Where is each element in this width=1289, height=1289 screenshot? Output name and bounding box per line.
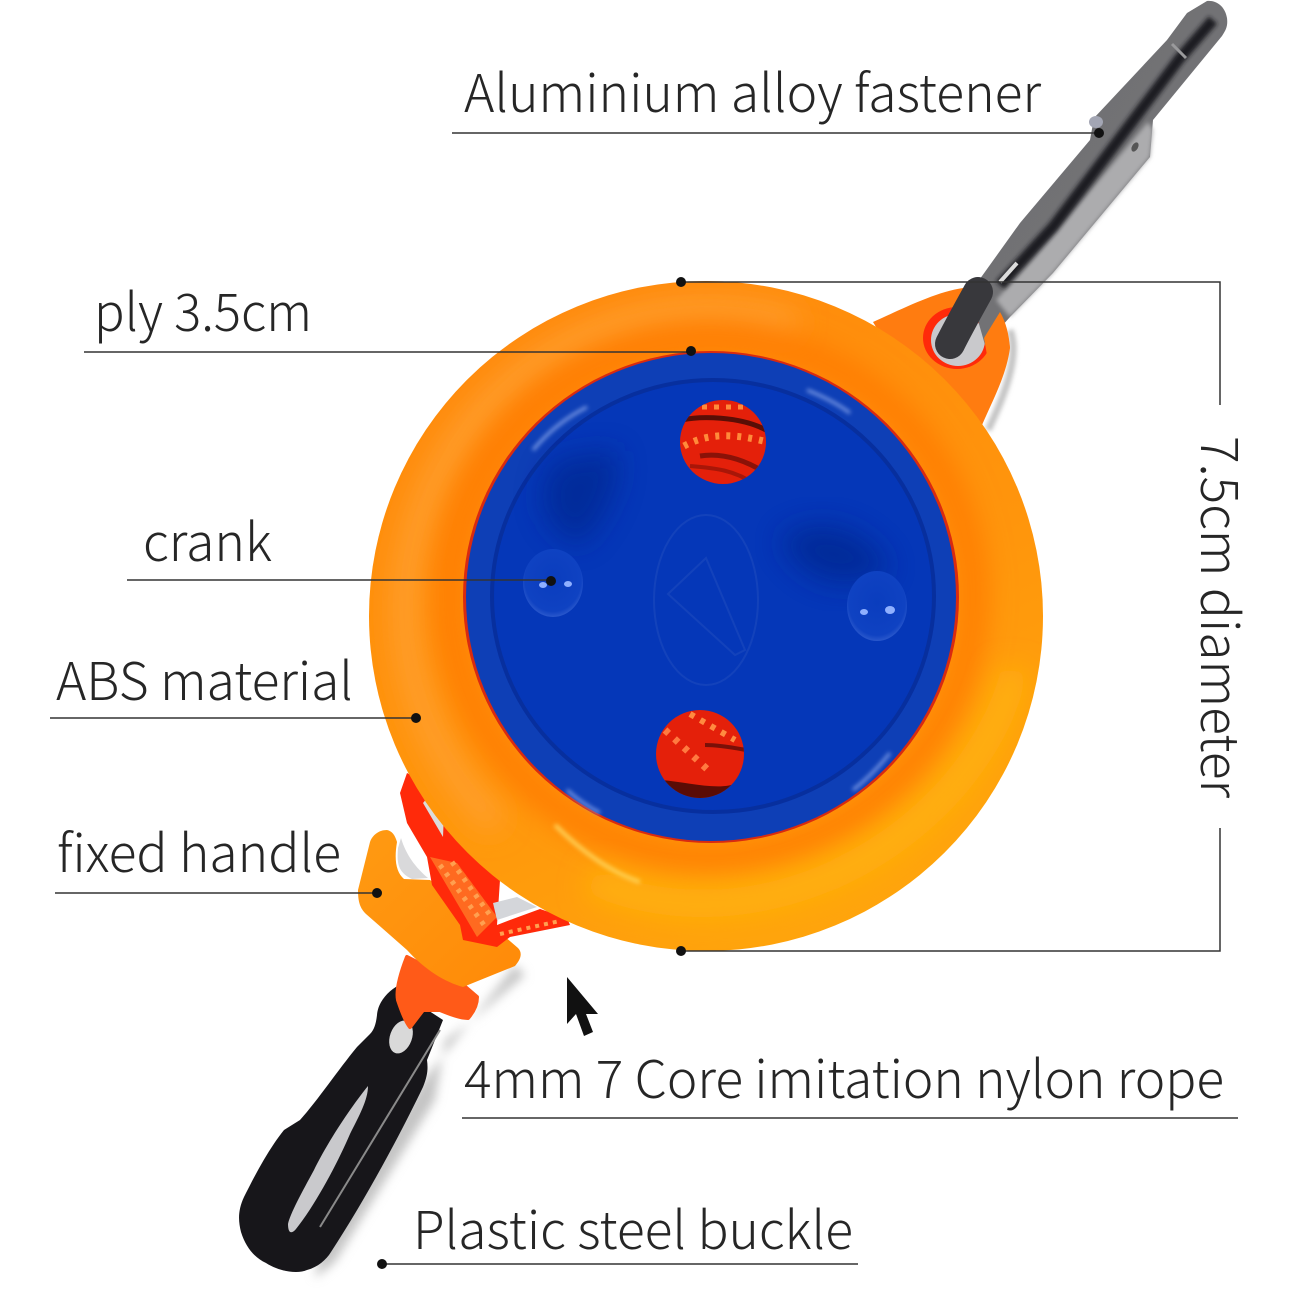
label: aluminium alloy fastener: Aluminium alloy fastener	[464, 52, 1041, 127]
label: ABS material: ABS material	[56, 640, 353, 715]
icon: cursor arrow	[567, 977, 598, 1036]
shadow under reel tab	[988, 330, 1013, 430]
label: ply 3.5cm: ply 3.5cm	[94, 271, 312, 346]
icon: left crank peg	[523, 549, 583, 617]
icon: rope knot below handle	[397, 957, 477, 1027]
icon: top rope window	[680, 400, 766, 484]
soft drop shadows	[315, 965, 525, 1278]
label: crank: crank	[143, 501, 272, 576]
icon: plastic steel buckle	[239, 983, 443, 1272]
icon: bottom rope window	[654, 708, 746, 800]
icon: tab lip over fastener	[984, 312, 1010, 372]
icon: orange reel body	[369, 281, 1043, 951]
label: crank	[127, 501, 556, 586]
icon: nylon cord	[398, 773, 570, 947]
label: plastic steel buckle: Plastic steel buckle	[413, 1189, 853, 1264]
icon: aluminium alloy fastener	[950, 1, 1227, 345]
dimension: 7.5cm diameter	[676, 277, 1261, 956]
icon: fixed handle	[358, 830, 521, 987]
label: ply 3.5cm	[84, 271, 696, 356]
label: nylon rope: 4mm 7 Core imitation nylon rope	[464, 1038, 1224, 1113]
icon: blue winding disc	[463, 351, 959, 843]
icon: embossed logo	[654, 515, 758, 685]
dimension: 7.5cm diameter: 7.5cm diameter	[1186, 436, 1261, 798]
rim highlights	[533, 390, 890, 813]
icon: reel loop tab	[873, 288, 1010, 430]
label: fixed handle: fixed handle	[57, 812, 341, 887]
icon: right crank peg	[847, 571, 907, 641]
